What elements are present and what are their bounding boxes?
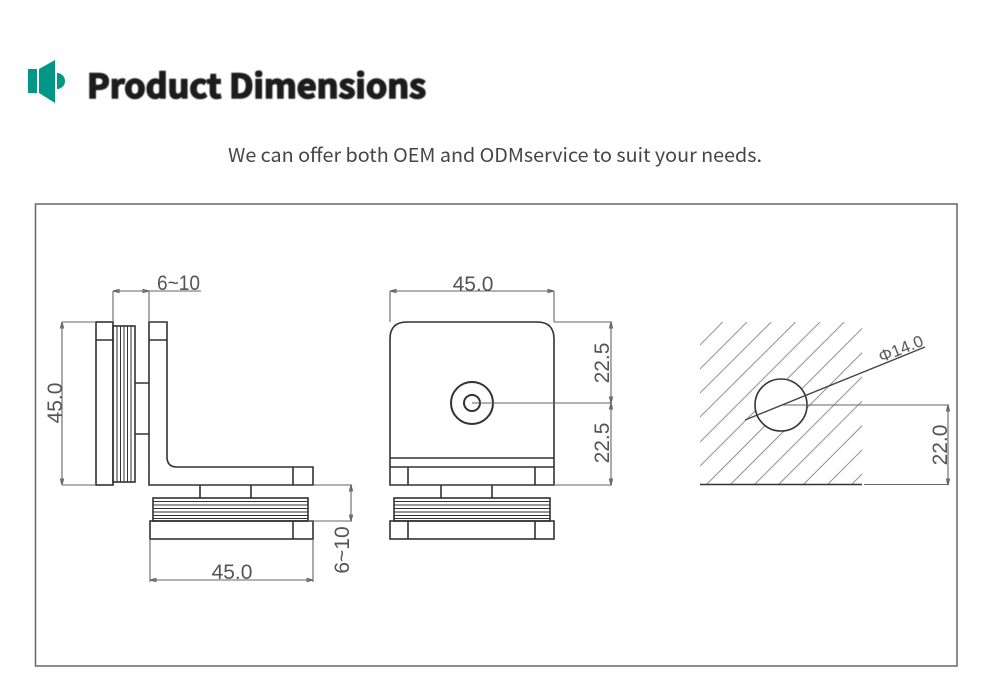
label: 6~10 right: 6~10 <box>331 526 354 574</box>
drawing: side view <box>44 272 354 584</box>
dimension lines and arrows <box>60 290 352 582</box>
panel: drawing frame <box>36 204 957 666</box>
hole <box>755 379 807 431</box>
icon: speaker <box>28 60 65 103</box>
drawing: front view <box>390 273 614 539</box>
label: 22.5 lower: 22.5 <box>591 423 614 463</box>
label: 6~10 top: 6~10 <box>157 272 200 295</box>
hatching <box>700 322 862 484</box>
label: 45.0 top: 45.0 <box>453 273 493 296</box>
subtitle: We can offer both OEM and ODMservice to suit your needs. <box>228 141 762 168</box>
label: 22.5 upper: 22.5 <box>591 343 614 383</box>
drawing: hole detail <box>700 322 950 486</box>
label: 45.0 bottom: 45.0 <box>212 561 252 584</box>
title: Product Dimensions <box>87 60 426 108</box>
bracket, glass plates and threads <box>96 322 313 539</box>
label: 22.0: 22.0 <box>929 425 952 465</box>
label: diameter 14.0: Φ14.0 <box>876 331 926 366</box>
label: 45.0 left: 45.0 <box>44 383 67 423</box>
